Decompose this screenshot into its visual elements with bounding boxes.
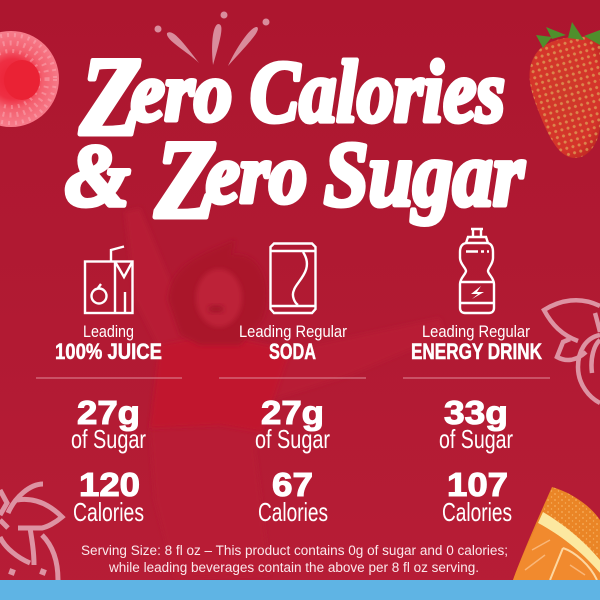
category name: SODA [269, 339, 316, 364]
strawberry [530, 22, 600, 158]
strawberry outline left [0, 484, 62, 580]
title [65, 35, 525, 242]
label: Leading [83, 322, 134, 341]
title: & [65, 128, 130, 225]
category name: ENERGY DRINK [411, 339, 542, 364]
serving size footnote [81, 543, 508, 575]
title: Calories [250, 44, 505, 141]
sugar value: 27g [261, 394, 324, 431]
decorative splash [154, 12, 270, 66]
column: soda [239, 244, 347, 527]
icon: sports bottle [460, 229, 494, 313]
icon: soda can [270, 244, 316, 313]
calories label: Calories [258, 497, 328, 527]
leaf outline right [544, 300, 600, 403]
title: ero [131, 46, 232, 139]
title: ero [206, 128, 307, 221]
sugar value: 27g [77, 394, 140, 431]
category name: 100% JUICE [55, 339, 162, 364]
calories value: 120 [79, 466, 140, 503]
blue footer bar [0, 580, 600, 600]
title: Z [79, 35, 142, 159]
calories label: Calories [442, 497, 512, 527]
label: Leading Regular [422, 322, 530, 341]
sugar label: of Sugar [255, 424, 330, 454]
sugar value: 33g [444, 394, 508, 431]
calories value: 67 [272, 466, 313, 503]
title: Z [154, 118, 217, 242]
label: Leading Regular [239, 322, 347, 341]
serving size footnote: Serving Size: 8 fl oz – This product contains 0g of sugar and 0 calories; [81, 543, 508, 558]
sugar label: of Sugar [71, 424, 146, 454]
column: juice [55, 246, 162, 527]
title: Sugar [324, 123, 525, 225]
icon: juice box [85, 246, 132, 313]
sugar label: of Sugar [439, 424, 513, 454]
orange slice [513, 487, 600, 580]
column: energy drink [411, 229, 542, 527]
raspberry [0, 31, 59, 127]
calories label: Calories [73, 497, 144, 527]
faded photo of jumping woman [125, 208, 445, 578]
serving size footnote: while leading beverages contain the above per 8 fl oz serving. [108, 560, 479, 575]
calories value: 107 [447, 466, 508, 503]
